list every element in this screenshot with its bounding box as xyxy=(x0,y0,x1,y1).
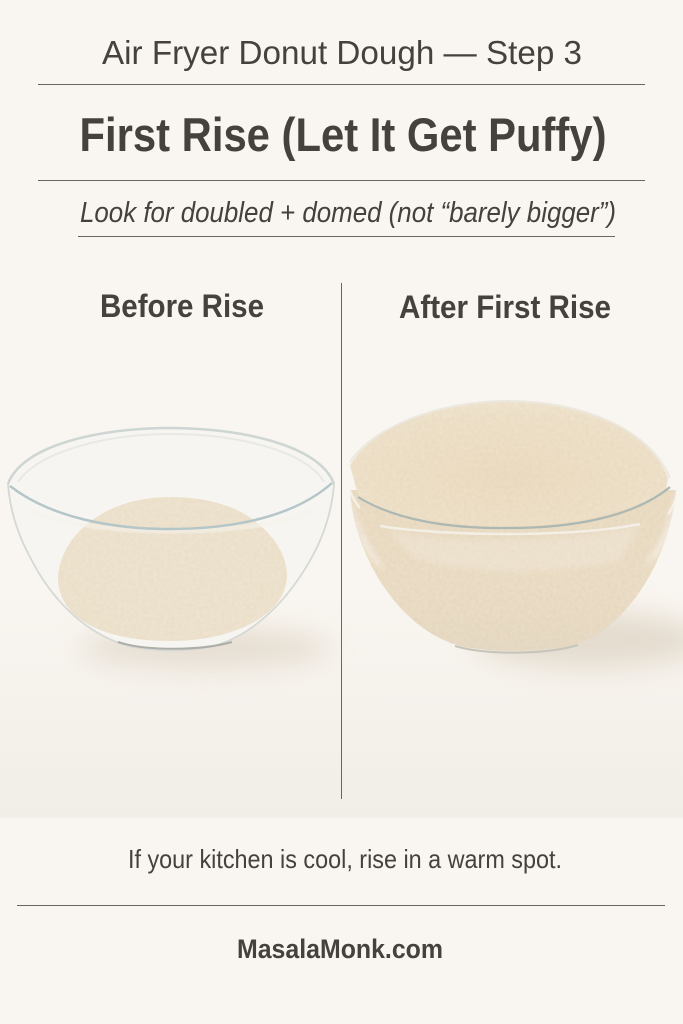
bowl rim xyxy=(358,487,670,528)
footer brand: MasalaMonk.com xyxy=(237,934,443,964)
dough xyxy=(58,497,287,641)
photo: bowl after rise xyxy=(346,401,683,668)
photo: bowl before rise xyxy=(8,428,334,668)
photo backdrop xyxy=(0,250,683,818)
header xyxy=(38,34,645,237)
center divider xyxy=(341,283,342,799)
shadow xyxy=(475,612,683,668)
header line: step label: Air Fryer Donut Dough — Step 3 xyxy=(102,34,582,71)
glass highlight under rim xyxy=(30,510,312,531)
glass outer wall xyxy=(8,484,334,650)
column heading: before: Before Rise xyxy=(100,288,264,324)
dough lower in bowl xyxy=(350,490,676,651)
glass back rim xyxy=(8,428,334,484)
dough dome xyxy=(350,401,668,526)
shadow xyxy=(80,628,330,668)
caption: If your kitchen is cool, rise in a warm spot. xyxy=(128,844,562,874)
base xyxy=(118,642,232,649)
wrap top sheen xyxy=(350,401,670,478)
column heading: after: After First Rise xyxy=(399,289,611,325)
base rim xyxy=(455,645,578,653)
plastic wrap haze xyxy=(346,470,679,571)
caption band xyxy=(0,818,683,1024)
glass front rim xyxy=(10,483,332,529)
title: First Rise (Let It Get Puffy) xyxy=(80,108,606,161)
subtitle: Look for doubled + domed (not “barely bigger”) xyxy=(80,197,616,229)
bowl body xyxy=(8,428,334,650)
plastic wrap edge xyxy=(347,462,678,534)
